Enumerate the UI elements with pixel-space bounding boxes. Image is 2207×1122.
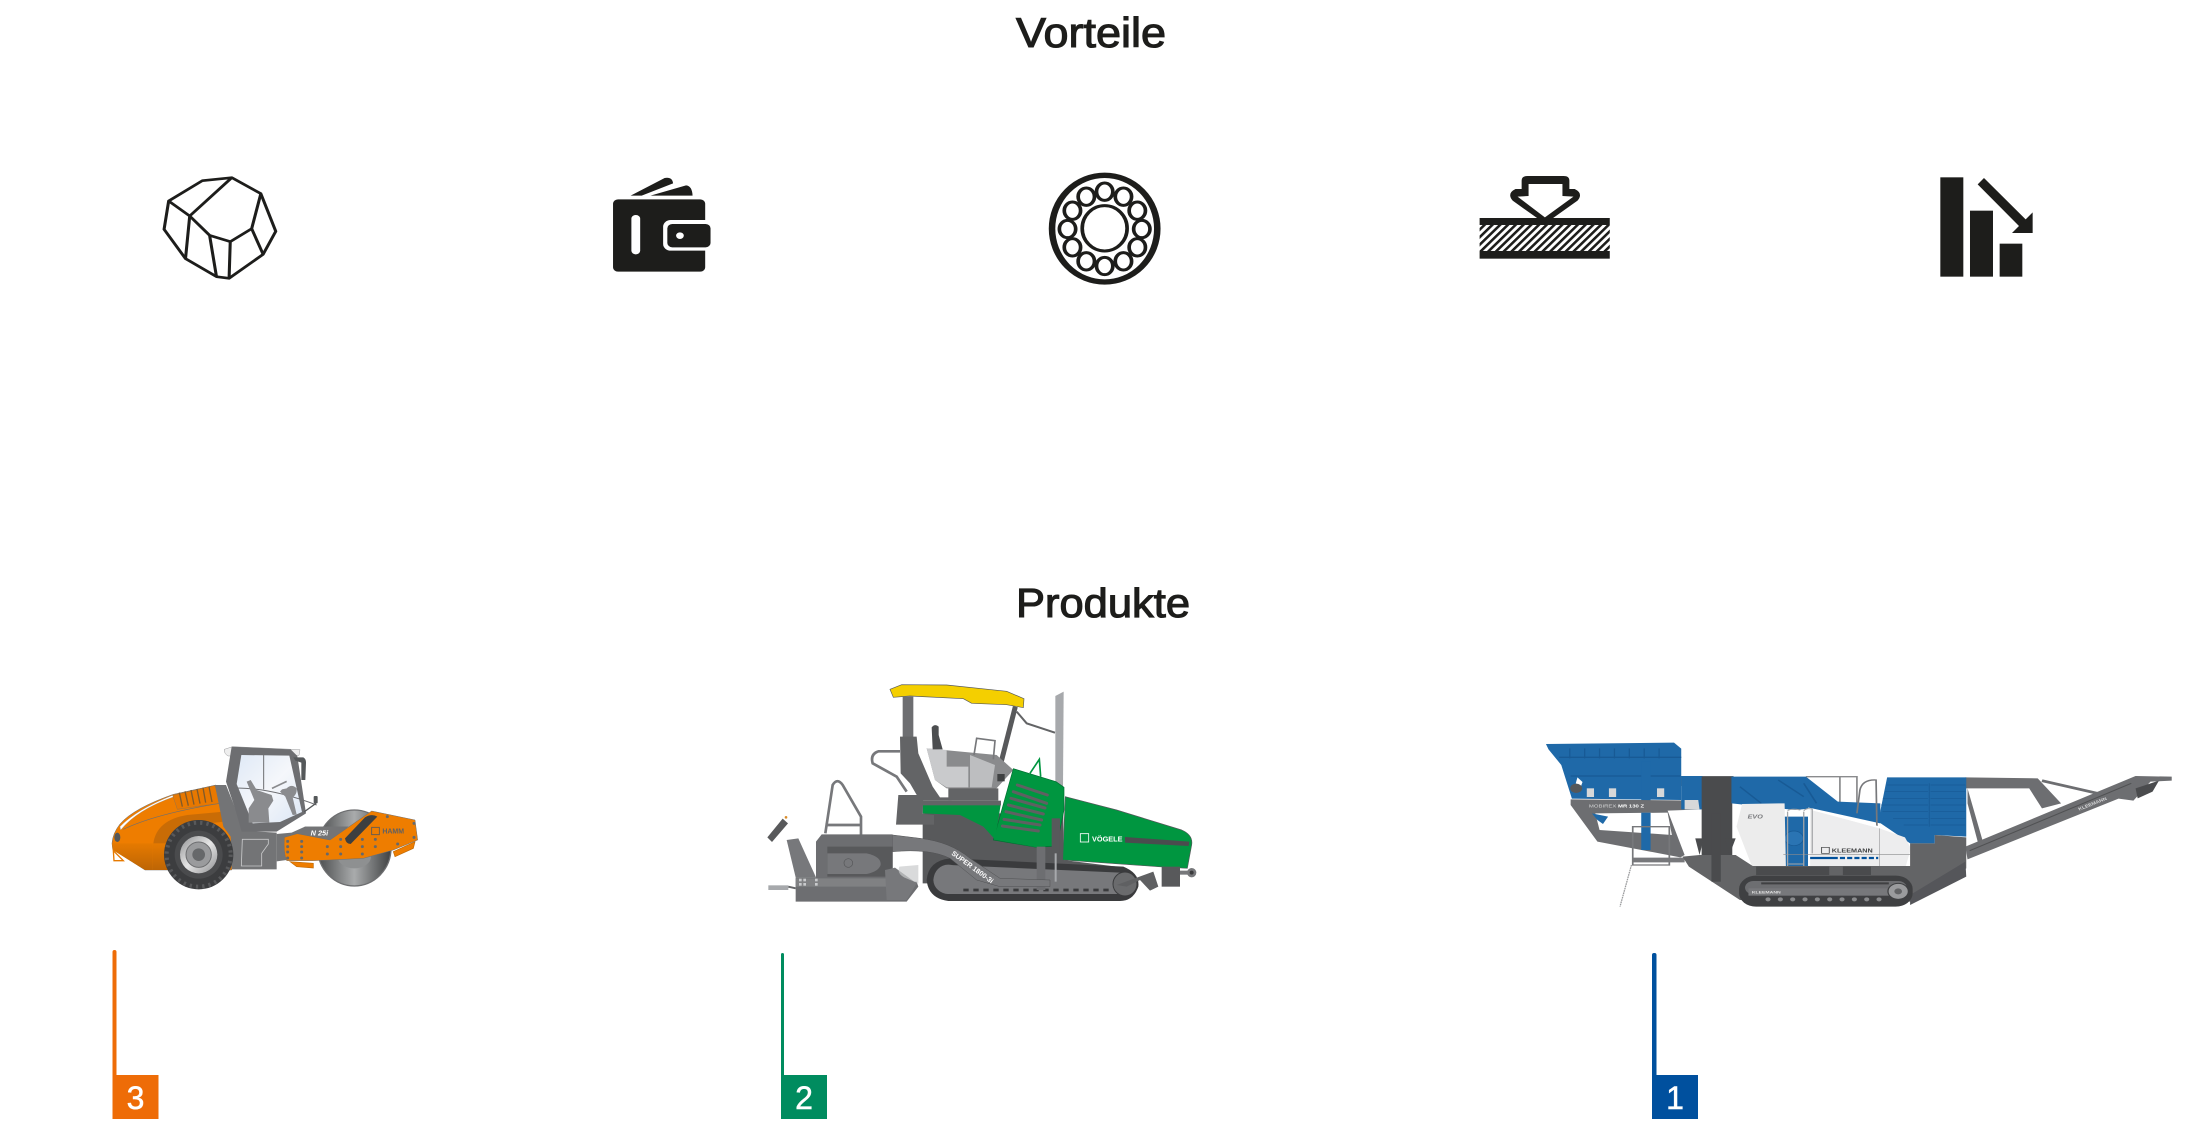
cab bbox=[226, 747, 306, 832]
hopper bbox=[1546, 743, 1681, 800]
tracks bbox=[1739, 876, 1913, 907]
evo label: EVO bbox=[1748, 814, 1763, 820]
dark body bbox=[923, 813, 1117, 883]
brand label: HAMM bbox=[382, 829, 404, 836]
discharge conveyor bbox=[1965, 776, 2172, 859]
louvres bbox=[173, 785, 219, 809]
lower frame bbox=[1571, 799, 1702, 857]
green side panel bbox=[993, 769, 1064, 847]
cab window bbox=[237, 755, 302, 823]
mast bbox=[900, 737, 952, 801]
brand label: VÖGELE bbox=[1092, 835, 1123, 844]
drum bbox=[318, 810, 391, 886]
marker 1: blue line and number: 1 bbox=[1666, 1080, 1684, 1116]
marker 2: green line and number bbox=[781, 953, 827, 1119]
louvres bbox=[1002, 785, 1047, 831]
grey body bbox=[1683, 835, 1966, 902]
rear blue cover bbox=[1878, 777, 1966, 843]
white panels bbox=[1737, 803, 1786, 866]
crusher blue housing bbox=[1731, 777, 1880, 823]
screed bbox=[796, 834, 918, 902]
icon: rock bbox=[164, 178, 276, 278]
marker 2: green line and number: 2 bbox=[795, 1080, 813, 1116]
track bbox=[927, 858, 1138, 901]
green rear hood bbox=[1063, 797, 1192, 868]
side arm bbox=[893, 835, 1050, 887]
icon: falling bars bbox=[1940, 177, 2033, 277]
model label: MOBIREX MR 130 Z bbox=[1589, 804, 1645, 809]
brand label: KLEEMANN bbox=[1832, 848, 1873, 854]
exhaust bbox=[1055, 692, 1064, 787]
centre column bbox=[1681, 776, 1703, 809]
handrail bbox=[872, 751, 907, 792]
yellow roof bbox=[890, 685, 1024, 708]
support legs bbox=[1037, 847, 1045, 890]
machine: orange Hamm roller bbox=[112, 747, 418, 889]
model label: SUPER 1800-3i bbox=[950, 850, 994, 885]
machine: blue Kleemann crusher bbox=[1546, 743, 2172, 907]
title: Produkte: Produkte bbox=[1016, 580, 1190, 626]
marker 3: orange line and number bbox=[112, 950, 158, 1119]
marker 1: blue line and number bbox=[1652, 953, 1698, 1119]
title: Vorteile: Vorteile bbox=[1016, 9, 1166, 56]
tracks: KLEEMANN bbox=[1752, 890, 1781, 894]
posts bbox=[903, 697, 913, 743]
icon: ball bearing bbox=[1052, 175, 1157, 282]
icon: wallet bbox=[613, 178, 713, 272]
hood bbox=[112, 785, 238, 870]
model label: N 25i bbox=[311, 828, 329, 837]
operator bbox=[247, 780, 297, 823]
machine: green Vögele paver bbox=[767, 685, 1196, 902]
icon: pressure on surface bbox=[1480, 176, 1610, 259]
machine: blue Kleemann crusher: KLEEMANN bbox=[2077, 796, 2109, 812]
hopper frame bbox=[896, 795, 934, 825]
conveyor support bbox=[1965, 777, 2061, 808]
roof bbox=[224, 747, 300, 756]
front fork bbox=[284, 811, 418, 861]
operator seat area bbox=[927, 748, 1013, 790]
plate bbox=[292, 827, 348, 840]
rear tow bbox=[1117, 872, 1158, 891]
mirrors bbox=[293, 757, 306, 780]
marker 3: orange line and number: 3 bbox=[127, 1080, 144, 1116]
top frame bbox=[1680, 776, 1734, 786]
brand logo bbox=[1080, 834, 1089, 842]
sensor arm bbox=[787, 838, 816, 877]
rear wheel bbox=[164, 820, 233, 889]
ladder bbox=[1788, 809, 1812, 891]
chassis bbox=[215, 785, 277, 869]
